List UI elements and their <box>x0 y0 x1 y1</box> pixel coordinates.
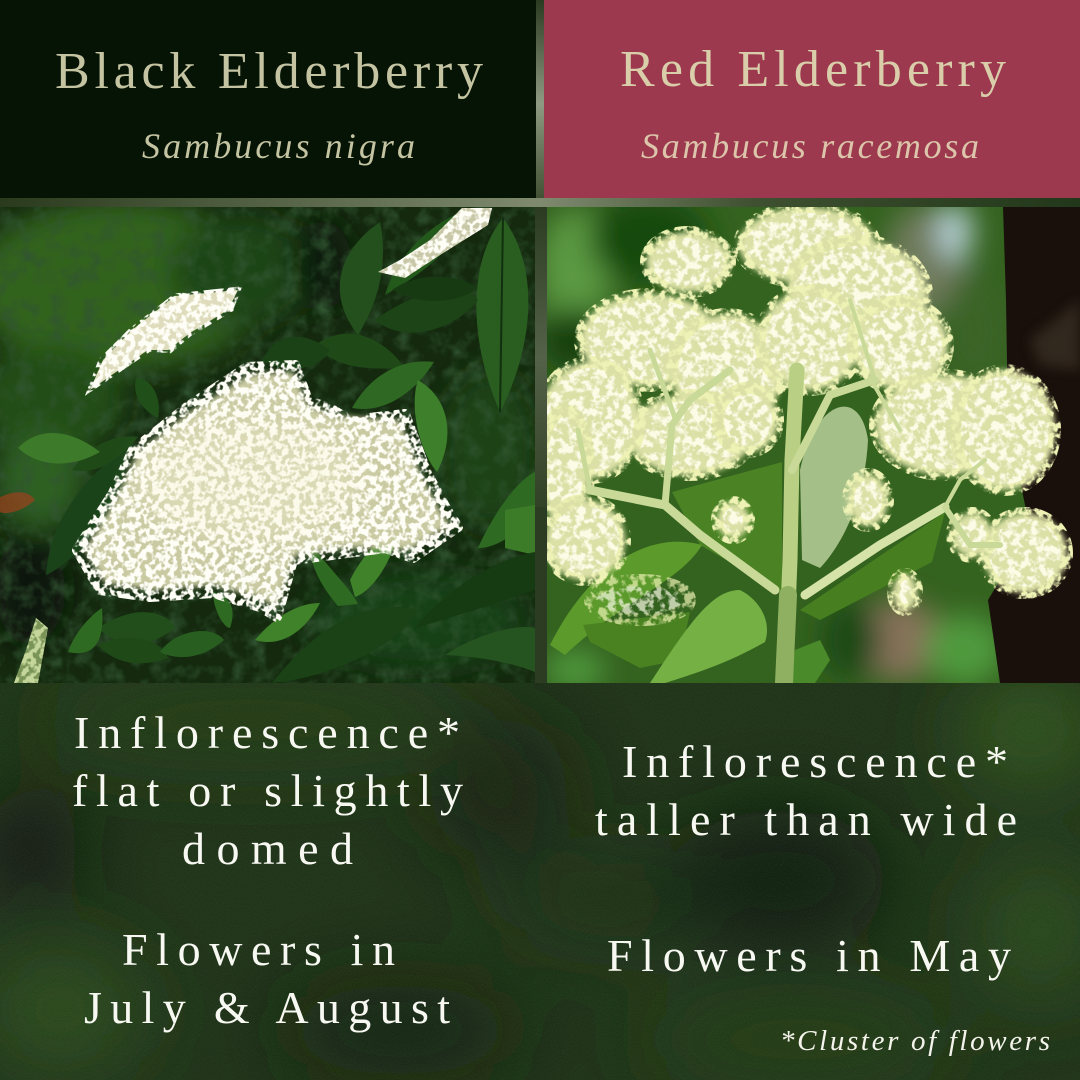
heading: Red Elderberry: Red Elderberry <box>620 41 1006 98</box>
stems <box>578 300 1000 683</box>
panel: black elderberry header <box>0 0 536 198</box>
leaves <box>0 208 535 683</box>
text block: red elderberry inflorescence: Inflorescence* <box>622 736 1008 787</box>
heading: Black Elderberry: Black Elderberry <box>55 43 483 100</box>
panel: red elderberry header <box>544 0 1080 198</box>
subtitle: Sambucus nigra: Sambucus nigra <box>142 126 415 166</box>
tree trunk <box>988 207 1080 683</box>
text block: black elderberry inflorescence <box>72 707 463 874</box>
text block: black elderberry flowering time: Flowers in <box>122 924 395 975</box>
text block: red elderberry flowering time: Flowers in May <box>607 930 1011 981</box>
flower cluster: main inflorescence <box>77 365 458 617</box>
flower cluster: top right inflorescence <box>378 208 492 278</box>
flower cluster: pale blossom heads <box>540 207 1067 620</box>
text block: red elderberry inflorescence: taller than wide <box>595 794 1017 845</box>
leaves <box>550 407 945 683</box>
flower buds <box>14 618 48 683</box>
text block: black elderberry inflorescence: domed <box>182 823 353 874</box>
text block: black elderberry flowering time: July & August <box>84 982 450 1033</box>
flower cluster: upper left inflorescence <box>88 288 240 392</box>
subtitle: Sambucus racemosa: Sambucus racemosa <box>641 126 979 166</box>
text block: black elderberry inflorescence: flat or slightly <box>72 765 463 816</box>
text block: black elderberry inflorescence: Inflorescence* <box>74 707 460 758</box>
text block: black elderberry flowering time <box>84 924 450 1033</box>
text block: red elderberry inflorescence <box>595 736 1017 845</box>
photo: black elderberry flower cluster <box>0 200 540 683</box>
photo: red elderberry flower cluster <box>540 195 1080 690</box>
footnote: *Cluster of flowers <box>780 1025 1050 1057</box>
panel: blurred green footer background <box>0 680 1080 1080</box>
